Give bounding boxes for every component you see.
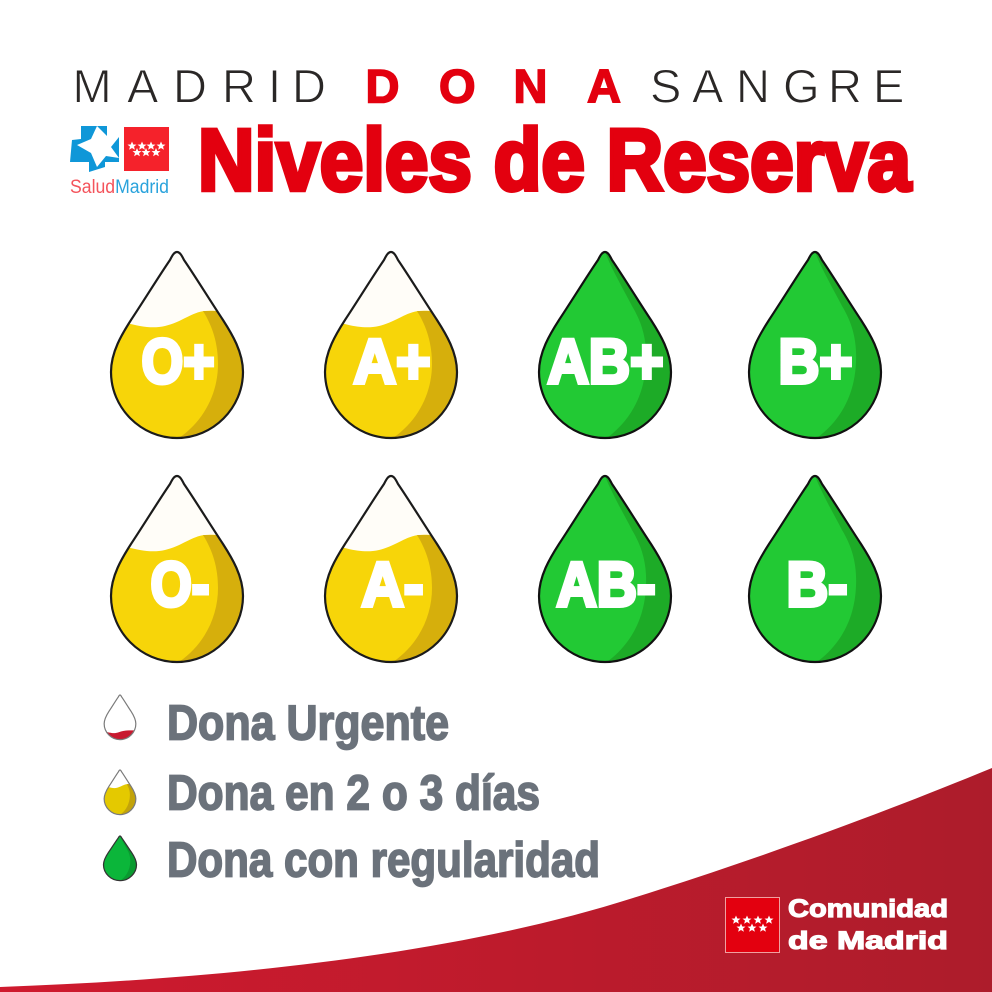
drop: O-: [107, 476, 247, 666]
red swoosh background: [0, 768, 992, 992]
drop: O-: O-: [150, 550, 210, 620]
drop: AB+: [539, 252, 675, 438]
drop: A-: A-: [362, 550, 424, 620]
heading: Madrid Dona Sangre: MADRID: [72, 60, 326, 112]
drop: B-: [749, 476, 885, 662]
drop: A+: [321, 252, 461, 442]
heading: Madrid Dona Sangre: [72, 60, 904, 112]
logo: Comunidad de Madrid: Comunidad: [788, 895, 948, 923]
legend: Dona en 2 o 3 días: Dona en 2 o 3 días: [167, 766, 540, 820]
logo: Comunidad de Madrid: [726, 895, 948, 955]
drop: B+: B+: [778, 327, 852, 397]
drop: A-: [321, 476, 461, 666]
drop: B+: [749, 252, 885, 438]
drop: AB-: [539, 476, 675, 662]
logo: SaludMadrid: SaludMadrid: [70, 177, 169, 198]
legend: Dona Urgente: Dona Urgente: [167, 696, 449, 750]
title: Niveles de Reserva: Niveles de Reserva: [198, 112, 912, 209]
logo: SaludMadrid: [70, 126, 169, 198]
drop: AB+: AB+: [548, 327, 664, 397]
heading: Madrid Dona Sangre: SANGRE: [650, 60, 904, 112]
drop: B-: B-: [786, 550, 848, 620]
drop: O+: O+: [142, 327, 214, 397]
drop: O+: [107, 252, 247, 442]
drop: A+: A+: [354, 327, 430, 397]
heading: Madrid Dona Sangre: DONA: [366, 60, 621, 112]
legend: Dona con regularidad: Dona con regularidad: [167, 834, 600, 888]
logo: Comunidad de Madrid: de Madrid: [788, 927, 948, 955]
drop: AB-: AB-: [556, 550, 656, 620]
legend: Dona en 2 o 3 días: [104, 769, 539, 816]
